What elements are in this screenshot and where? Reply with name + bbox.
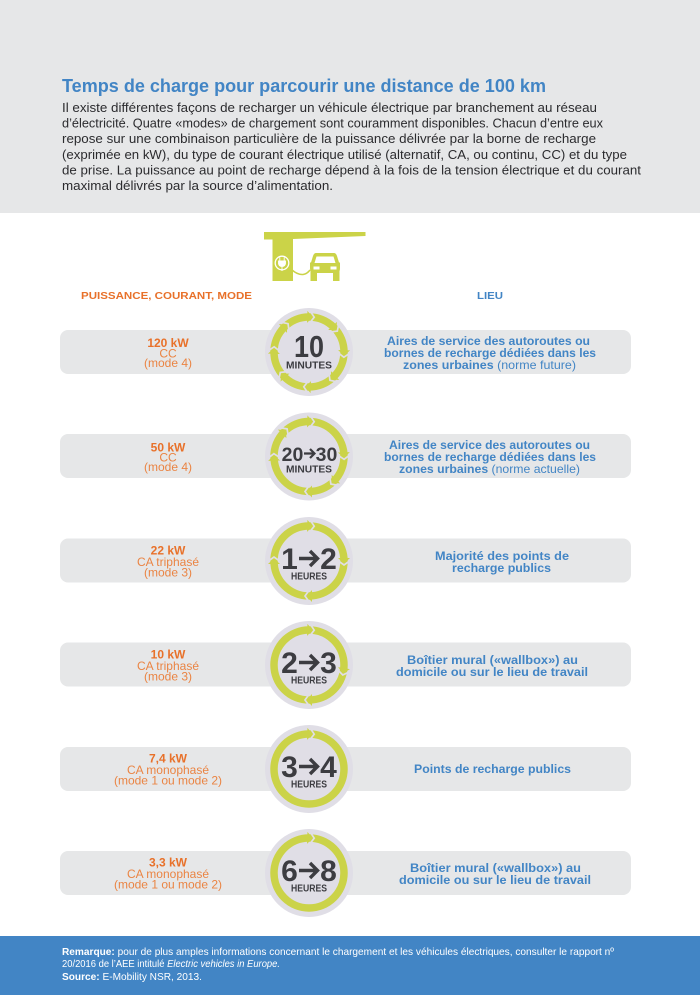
power label: (mode 4) <box>144 356 192 370</box>
location label: domicile ou sur le lieu de travail <box>396 665 588 679</box>
time badge: HEURES <box>291 674 327 686</box>
time badge: HEURES <box>291 778 327 790</box>
time badge <box>265 308 353 396</box>
time badge: 4 <box>320 751 337 784</box>
power label: (mode 3) <box>144 670 192 684</box>
location label: Aires de service des autoroutes ou <box>387 334 590 348</box>
row: 120 kW, 10 minutes <box>60 308 631 396</box>
location label <box>384 334 596 372</box>
row: 3,3 kW, 6 to 8 hours <box>60 829 631 917</box>
time badge: HEURES <box>291 570 327 582</box>
time badge: MINUTES <box>286 464 332 476</box>
row: 7,4 kW, 3 to 4 hours <box>60 725 631 813</box>
location label <box>435 549 569 575</box>
power label <box>114 752 222 788</box>
row: 10 kW, 2 to 3 hours <box>60 621 631 709</box>
time badge: 10 <box>294 329 324 364</box>
time badge: 20 <box>282 444 303 466</box>
power label: CC <box>159 346 177 360</box>
power label: (mode 4) <box>144 460 192 474</box>
time badge: 30 <box>316 444 337 466</box>
intro text: repose sur une combinaison particulière de la puissance délivrée par la borne de recharge <box>62 131 596 146</box>
row: 50 kW, 20 to 30 minutes <box>60 412 631 500</box>
location label: recharge publics <box>452 561 551 575</box>
power label <box>114 856 222 892</box>
location label: Aires de service des autoroutes ou <box>389 438 590 452</box>
power label: 3,3 kW <box>149 856 188 870</box>
icon: charging station and car <box>264 232 366 281</box>
location label <box>399 861 591 887</box>
footer panel <box>0 936 700 995</box>
power label: CA monophasé <box>127 867 209 881</box>
intro text: maximal délivrés par la source d’alimentation. <box>62 178 333 193</box>
intro text: de prise. La puissance au point de recharge dépend à la fois de la tension électrique et du courant <box>62 162 641 178</box>
intro text: d’électricité. Quatre «modes» de chargement sont couramment disponibles. Chacun d’entre eux <box>62 116 603 130</box>
location label: Boîtier mural («wallbox») au <box>410 861 581 875</box>
time badge: 3 <box>320 647 337 680</box>
location label: zones urbaines (norme actuelle) <box>399 462 580 476</box>
note text: Remarque: pour de plus amples informations concernant le chargement et les véhicules électriques, consulter le rapport nº <box>62 946 614 958</box>
location label: domicile ou sur le lieu de travail <box>399 873 591 887</box>
location label: zones urbaines (norme future) <box>403 358 576 372</box>
header panel <box>0 0 700 213</box>
row: 22 kW, 1 to 2 hours <box>60 517 631 605</box>
location label: bornes de recharge dédiées dans les <box>384 346 596 360</box>
column heading: power, current, mode: PUISSANCE, COURANT, MODE <box>81 290 252 302</box>
power label: 10 kW <box>151 648 186 662</box>
time badge: 6 <box>281 855 298 888</box>
power label: 120 kW <box>147 336 189 350</box>
location label: Points de recharge publics <box>414 762 571 776</box>
title: Temps de charge pour parcourir une distance de 100 km <box>62 76 546 96</box>
time badge: 2 <box>320 543 337 576</box>
location label: Majorité des points de <box>435 549 569 563</box>
source: Source: E-Mobility NSR, 2013. <box>62 971 202 983</box>
time badge <box>265 725 353 813</box>
intro text: Il existe différentes façons de recharger un véhicule électrique par branchement au réseau <box>62 100 597 115</box>
time badge <box>265 412 353 500</box>
power label: CA triphasé <box>137 659 199 673</box>
intro text: (exprimée en kW), du type de courant électrique utilisé (alternatif, CA, ou continu, CC) et du type <box>62 147 627 162</box>
power label <box>144 336 192 370</box>
power label: 50 kW <box>151 440 186 454</box>
time badge: 2 <box>281 647 298 680</box>
power label: (mode 1 ou mode 2) <box>114 878 222 892</box>
location label <box>396 653 588 679</box>
time badge: MINUTES <box>286 360 332 372</box>
power label: CA triphasé <box>137 555 199 569</box>
time badge <box>265 829 353 917</box>
time badge: 3 <box>281 751 298 784</box>
power label: 22 kW <box>151 544 186 558</box>
power label: 7,4 kW <box>149 752 188 766</box>
power label <box>137 544 199 580</box>
time badge <box>265 517 353 605</box>
power label <box>137 648 199 684</box>
location label: bornes de recharge dédiées dans les <box>384 450 596 464</box>
intro text <box>62 100 641 193</box>
power label: CC <box>159 450 177 464</box>
time badge <box>265 621 353 709</box>
note text continued: 20/2016 de l’AEE intitulé Electric vehicles in Europe. <box>62 958 280 970</box>
power label: CA monophasé <box>127 763 209 777</box>
time badge: HEURES <box>291 882 327 894</box>
power label: (mode 3) <box>144 566 192 580</box>
time badge: 8 <box>320 855 337 888</box>
power label: (mode 1 ou mode 2) <box>114 774 222 788</box>
power label <box>144 440 192 474</box>
location label <box>384 438 596 476</box>
column heading: location: LIEU <box>477 290 503 302</box>
time badge: 1 <box>281 543 298 576</box>
location label: Boîtier mural («wallbox») au <box>407 653 578 667</box>
